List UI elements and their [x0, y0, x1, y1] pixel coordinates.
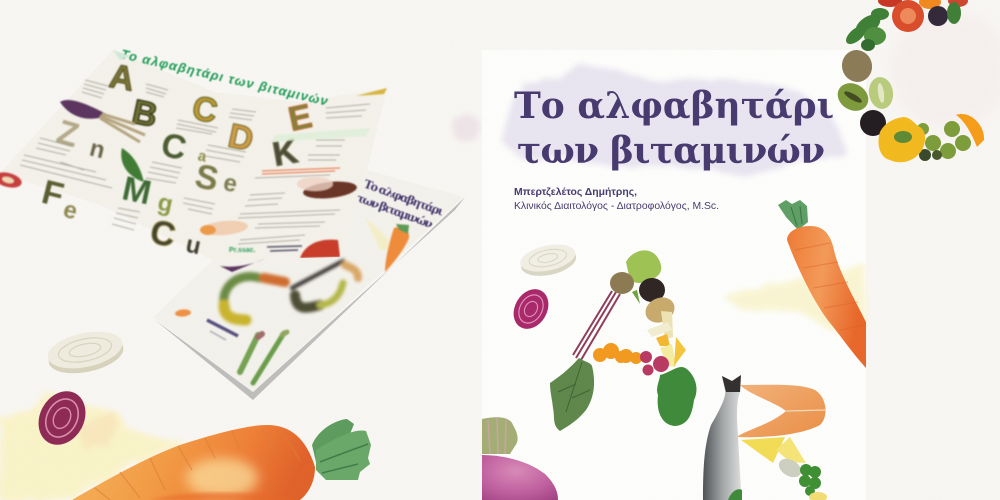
turnip — [482, 417, 558, 500]
cover letter U — [292, 261, 358, 308]
salmon bone line — [786, 410, 825, 411]
grains — [776, 455, 804, 481]
egg — [809, 492, 827, 500]
cheese wedges — [741, 437, 806, 463]
yellow pepper — [878, 117, 925, 162]
leaflet illustrations — [0, 88, 387, 258]
yellow watercolor wash bottom left — [0, 392, 187, 500]
carrot highlight — [186, 458, 258, 498]
leaflet letters: Z — [52, 113, 83, 155]
turnip leaves — [482, 417, 518, 454]
leaflet letters: M — [119, 169, 155, 213]
beet slice left — [29, 383, 95, 453]
fish tail — [722, 375, 741, 392]
leaflet letters: S — [192, 157, 222, 199]
green sprig — [632, 290, 640, 304]
green leaf — [728, 489, 742, 500]
beet slice — [507, 283, 555, 335]
onion slice left — [44, 325, 127, 379]
salmon and carrot — [201, 219, 249, 237]
turnip body — [482, 455, 558, 500]
pepper stem — [894, 131, 912, 143]
beet stems — [573, 291, 620, 360]
leaflet logos: Pr.ssac. — [229, 247, 256, 254]
carrot ridges — [95, 428, 300, 500]
herb top — [947, 2, 961, 24]
leaflet letters: g — [155, 189, 175, 218]
dark plum — [639, 278, 665, 302]
kiwi — [610, 272, 634, 294]
leaflet letters: C — [158, 126, 190, 168]
peach stain on wash — [80, 410, 118, 450]
leaflet title: Το αλφαβητάρι των βιταμινών — [119, 46, 330, 109]
title: Το αλφαβητάρι — [514, 85, 834, 127]
radishes — [640, 351, 669, 376]
leaflet letters: A — [106, 57, 137, 99]
peas — [799, 464, 821, 496]
leaflet letters: e — [221, 169, 240, 198]
kiwi whole — [838, 47, 876, 85]
leaflet accent strips — [113, 50, 370, 174]
turnip leaf stripes — [488, 418, 506, 454]
leaflet letters — [38, 57, 315, 260]
cover carrot — [365, 218, 409, 272]
leaflet letters: K — [270, 132, 301, 174]
herbs — [843, 8, 889, 51]
sprout leaves — [917, 121, 971, 161]
large carrot bottom left — [72, 419, 371, 500]
leaflet body text — [20, 80, 370, 244]
salmon steak — [737, 385, 825, 437]
lettuce — [626, 250, 661, 283]
leaflet letters: B — [129, 93, 161, 135]
leaflet letters: D — [225, 117, 257, 159]
spinach — [657, 367, 696, 426]
cover letter C — [224, 277, 285, 320]
leaflet letters: e — [61, 196, 80, 225]
beetroot and wheat — [60, 100, 108, 119]
carrot body — [787, 226, 866, 368]
leaflet back cover shadow — [155, 197, 465, 400]
kiwi halves — [833, 75, 895, 116]
carrot leaves — [778, 200, 808, 230]
background washes — [451, 10, 1000, 142]
pea pod — [121, 148, 144, 182]
carrot ridges — [795, 243, 865, 330]
open leaflet — [0, 46, 387, 260]
carrot crossbar — [593, 343, 642, 364]
leaflet letters: n — [87, 135, 108, 164]
leaflet cover — [153, 170, 463, 392]
cover small carrot — [175, 309, 191, 317]
author — [514, 186, 719, 212]
sliced beet on edge — [0, 170, 23, 190]
beet leaf veins — [558, 362, 590, 412]
yellow wash right — [723, 263, 866, 330]
leaflet letters: a — [196, 147, 209, 166]
steak and salad — [302, 179, 358, 201]
cover title: Το αλφαβητάρι — [362, 177, 446, 219]
plum — [860, 110, 886, 136]
letter A made of vegetables — [550, 250, 696, 431]
leaflet letters: u — [183, 231, 203, 260]
author: Μπερτζελέτος Δημήτρης, — [514, 186, 637, 198]
plum top — [928, 6, 948, 26]
tomatoes and pepper — [878, 0, 968, 32]
top corner grain — [356, 88, 387, 96]
tomato corner — [300, 240, 340, 258]
carrot body — [72, 425, 315, 500]
onion slice — [518, 240, 579, 280]
carrot leaves — [312, 419, 371, 480]
author: Κλινικός Διαιτολόγος - Διατροφολόγος, M.Sc. — [514, 200, 719, 212]
cover beet top — [220, 258, 266, 272]
leaflet letters: E — [285, 97, 315, 139]
title — [514, 85, 834, 172]
beet leaf — [550, 358, 594, 431]
carrot shade — [150, 492, 300, 500]
fish — [703, 375, 742, 500]
carrot right — [778, 200, 866, 368]
orange wedge — [956, 114, 984, 147]
cover publisher text — [207, 320, 238, 340]
cover title: των βιταμινών — [355, 191, 435, 231]
poster sheet — [482, 50, 866, 500]
leaflet letters: C — [147, 213, 179, 255]
leaflet logos — [229, 246, 302, 254]
closed leaflet — [153, 170, 465, 400]
mushroom and cheese — [647, 311, 686, 367]
potato — [641, 293, 679, 327]
letter B made of foods — [703, 375, 827, 500]
leaflet sheet — [0, 50, 387, 260]
leaflet letters: C — [189, 89, 221, 131]
cover asparagus — [240, 332, 287, 383]
lilac wash — [500, 63, 847, 177]
letter C of fruit and vegetables top right — [833, 0, 984, 162]
title: των βιταμινών — [517, 130, 825, 172]
poster — [482, 50, 866, 500]
leaflet letters: F — [38, 173, 67, 215]
